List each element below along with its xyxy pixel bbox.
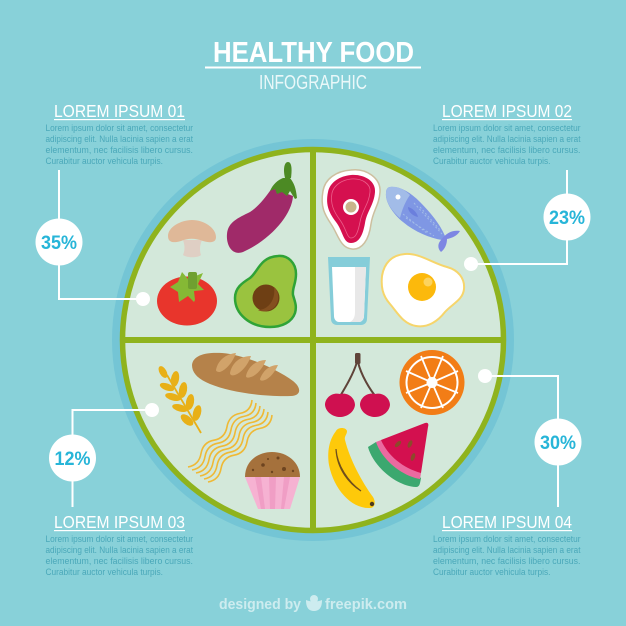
text block: lorem ipsum 04: Lorem ipsum dolor sit amet, consectetur	[433, 534, 581, 545]
title	[205, 37, 421, 94]
icon: fried egg	[382, 254, 464, 326]
text block: lorem ipsum 03: elementum, nec facilisis libero cursus.	[46, 556, 193, 567]
text block: lorem ipsum 03: adipiscing elit. Nulla lacinia sapien a erat	[46, 545, 193, 556]
callout: 30% connector: 30%	[540, 433, 576, 454]
text block: lorem ipsum 02: Lorem ipsum dolor sit amet, consectetur	[433, 123, 581, 134]
title: INFOGRAPHIC	[259, 72, 367, 94]
callout: 35% connector	[36, 170, 150, 306]
icon: orange	[400, 350, 464, 415]
text block: lorem ipsum 03: LOREM IPSUM 03	[54, 512, 185, 532]
footer credit	[219, 595, 407, 613]
text block: lorem ipsum 04	[433, 512, 581, 578]
text block: lorem ipsum 02: LOREM IPSUM 02	[442, 101, 572, 121]
icon: mushroom	[168, 220, 216, 257]
icon: tomato	[157, 272, 217, 326]
icon: eggplant	[227, 162, 297, 253]
text block: lorem ipsum 03: Lorem ipsum dolor sit amet, consectetur	[46, 534, 194, 545]
text block: lorem ipsum 02: Curabitur auctor vehicula turpis.	[433, 156, 550, 167]
text block: lorem ipsum 04: elementum, nec facilisis libero cursus.	[433, 556, 580, 567]
text block: lorem ipsum 04: adipiscing elit. Nulla lacinia sapien a erat	[433, 545, 581, 556]
callout: 12% connector	[49, 403, 159, 507]
text block: lorem ipsum 03	[46, 512, 194, 578]
icon: fish	[386, 187, 460, 252]
text block: lorem ipsum 02: elementum, nec facilisis libero cursus.	[433, 145, 580, 156]
footer credit: designed by	[219, 597, 301, 613]
text block: lorem ipsum 01: elementum, nec facilisis libero cursus.	[46, 145, 193, 156]
text block: lorem ipsum 01: adipiscing elit. Nulla lacinia sapien a erat	[46, 134, 193, 145]
text block: lorem ipsum 04: LOREM IPSUM 04	[442, 512, 572, 532]
title: HEALTHY FOOD	[213, 37, 414, 69]
icon: glass of milk	[328, 257, 370, 325]
icon: banana	[328, 428, 375, 508]
callout: 23% connector: 23%	[549, 208, 585, 229]
plate	[112, 139, 514, 541]
icon: avocado	[235, 256, 296, 327]
callout: 12% connector: 12%	[54, 449, 91, 470]
text block: lorem ipsum 01: Curabitur auctor vehicula turpis.	[46, 156, 163, 167]
text block: lorem ipsum 03: Curabitur auctor vehicula turpis.	[46, 567, 163, 578]
icon: noodles	[188, 400, 272, 482]
callout: 23% connector	[464, 170, 590, 271]
icon: cherries	[325, 353, 390, 417]
text block: lorem ipsum 02: adipiscing elit. Nulla lacinia sapien a erat	[433, 134, 581, 145]
icon: baguette	[192, 353, 299, 396]
text block: lorem ipsum 01: Lorem ipsum dolor sit amet, consectetur	[46, 123, 194, 134]
icon: steak	[322, 170, 380, 249]
icon: watermelon	[368, 423, 428, 487]
text block: lorem ipsum 04: Curabitur auctor vehicula turpis.	[433, 567, 550, 578]
icon: muffin	[245, 452, 300, 509]
footer credit: freepik.com	[325, 597, 407, 613]
text block: lorem ipsum 01: LOREM IPSUM 01	[54, 101, 185, 121]
text block: lorem ipsum 01	[46, 101, 194, 167]
callout: 30% connector	[478, 369, 582, 507]
icon: wheat	[157, 365, 203, 433]
text block: lorem ipsum 02	[433, 101, 581, 167]
callout: 35% connector: 35%	[41, 233, 77, 254]
